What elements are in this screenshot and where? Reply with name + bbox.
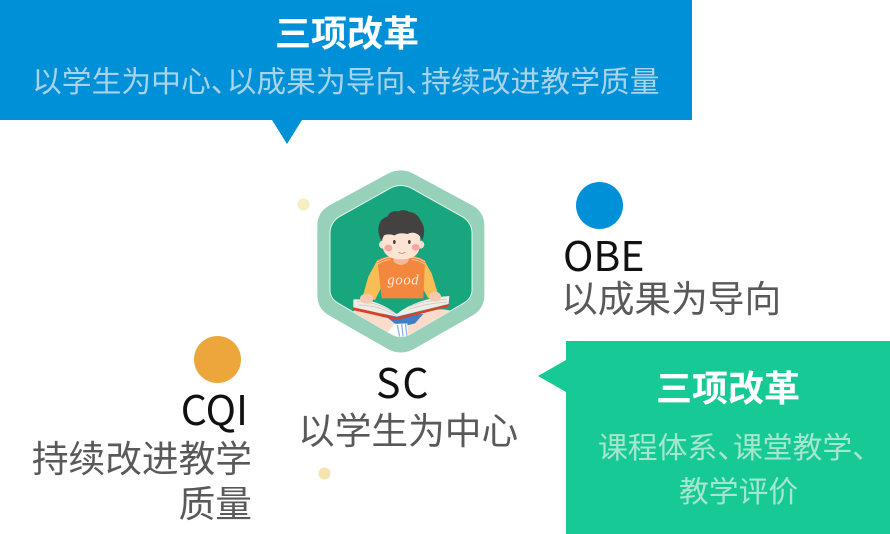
ears: [378, 240, 383, 249]
cheeks: [384, 245, 392, 251]
book: [353, 304, 449, 320]
neck: [394, 258, 408, 265]
heading: green callout title: 三项改革: [656, 360, 800, 412]
shorts: [384, 314, 423, 326]
icon: blue circle: [576, 182, 623, 229]
panel: green callout: [538, 341, 890, 534]
icon: small yellow dot bottom: [318, 468, 330, 480]
hands: [360, 294, 373, 304]
text: blue callout subtitle: 、: [405, 57, 435, 101]
sock: [388, 323, 408, 336]
panel: blue callout: [0, 0, 692, 144]
legs: [350, 309, 454, 337]
text: green callout body: [598, 423, 882, 511]
text: CQI description: [32, 429, 252, 528]
heading: blue callout title: 三项改革: [275, 5, 419, 57]
icon: small yellow dot top: [298, 198, 310, 210]
icon: hexagon badge with reading boy: good: [387, 273, 419, 289]
eyes and mouth: [393, 240, 396, 244]
icon: orange circle: [194, 336, 241, 383]
text: green callout body: 、: [717, 423, 747, 467]
text: blue callout subtitle: 、: [211, 57, 241, 101]
text: green callout body: 教学评价: [679, 467, 798, 511]
text: blue callout subtitle: 以学生为中心 以成果为导向 持续改进教学质量: [32, 57, 660, 101]
sleeves: [363, 260, 381, 300]
face: [382, 232, 420, 260]
shirt: [377, 256, 425, 298]
label: SC: SC: [376, 350, 431, 410]
text: SC description: 以学生为中心: [298, 401, 518, 455]
text: CQI description: 质量: [179, 474, 252, 528]
label: OBE: OBE: [563, 223, 645, 283]
label: CQI: CQI: [181, 377, 248, 437]
text: green callout body: 课程体系 课堂教学、: [598, 423, 882, 467]
text: CQI description: 持续改进教学: [32, 429, 252, 483]
hair: [378, 210, 424, 241]
text: OBE description: 以成果为导向: [561, 269, 781, 323]
icon: hexagon badge with reading boy: [317, 170, 484, 352]
